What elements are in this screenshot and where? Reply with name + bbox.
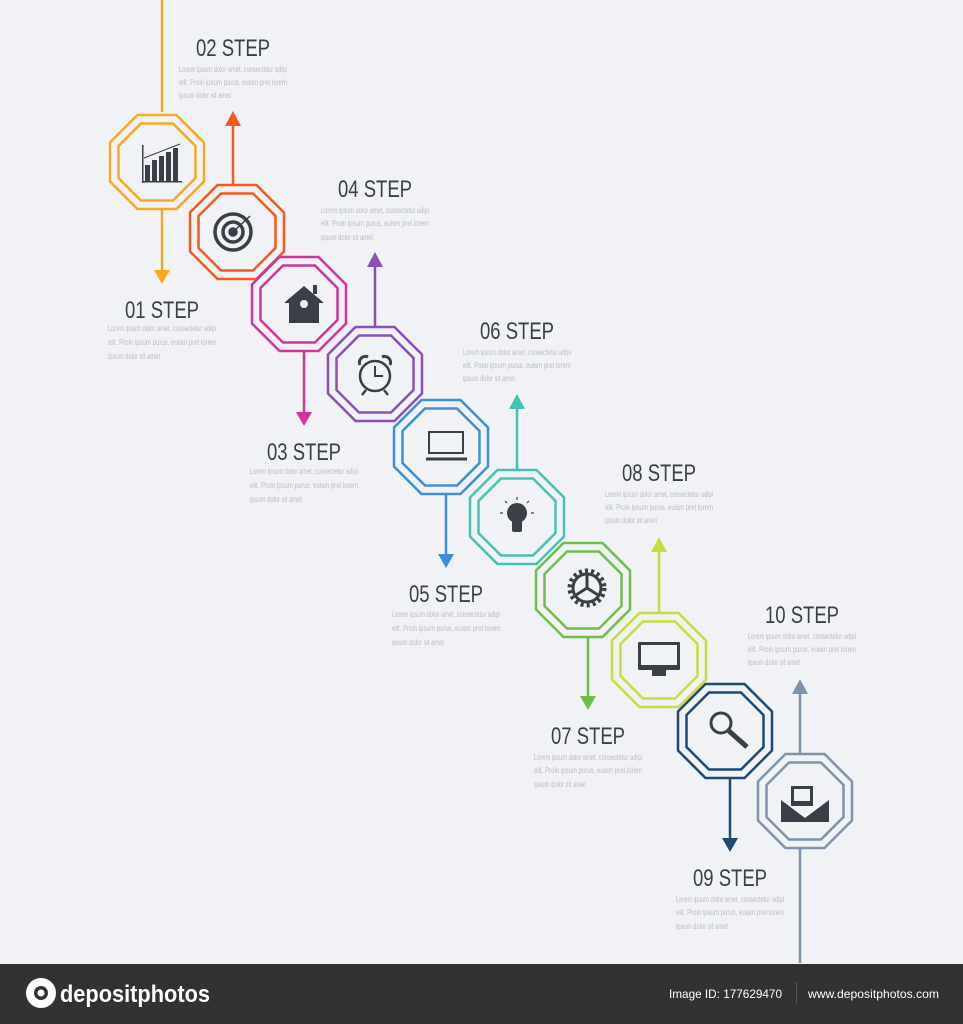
icon: lightbulb — [500, 497, 534, 532]
label 05: elit. Proin ipsum purus, euism pret lorem — [392, 623, 500, 633]
footer bar — [0, 964, 963, 1024]
footer logo — [26, 978, 210, 1008]
step 02 — [190, 111, 284, 279]
label 09: ipsum dolor sit amet — [676, 921, 728, 931]
connector line top — [161, 0, 163, 112]
step 03 — [252, 257, 346, 426]
icon: envelope — [781, 786, 829, 822]
icon: laptop — [426, 432, 467, 459]
label 05: 05 STEP — [409, 581, 483, 608]
label 04: 04 STEP — [338, 176, 412, 203]
icon: gear — [570, 571, 604, 605]
label 07: elit. Proin ipsum purus, euism pret lorem — [534, 765, 642, 775]
label 03: ipsum dolor sit amet — [250, 494, 302, 504]
label 10 — [748, 602, 856, 667]
label 01: ipsum dolor sit amet — [108, 351, 160, 361]
label 02: 02 STEP — [196, 35, 270, 62]
label 01: Lorem ipsum dolor amet, consectetur adipi — [108, 323, 216, 333]
label 02: elit. Proin ipsum purus, euism pret lorem — [179, 77, 287, 87]
label 04: Lorem ipsum dolor amet, consectetur adipi — [321, 205, 429, 215]
label 08: Lorem ipsum dolor amet, consectetur adipi — [605, 489, 713, 499]
footer logo: depositphotos — [60, 981, 210, 1008]
step 07 — [536, 543, 630, 710]
label 03 — [250, 439, 358, 504]
label 08: 08 STEP — [622, 460, 696, 487]
icon: monitor — [638, 642, 680, 676]
step 06 — [470, 394, 564, 564]
icon: bar chart — [142, 144, 182, 183]
label 08 — [605, 460, 713, 525]
label 07 — [534, 723, 642, 789]
label 06: elit. Proin ipsum purus, euism pret lorem — [463, 360, 571, 370]
label 01: 01 STEP — [125, 297, 199, 324]
label 10: ipsum dolor sit amet — [748, 657, 800, 667]
label 03: 03 STEP — [267, 439, 341, 466]
step 05 — [394, 400, 488, 568]
label 01: elit. Proin ipsum purus, euism pret lorem — [108, 337, 216, 347]
step 01 — [110, 115, 204, 284]
connector line bottom — [799, 848, 801, 963]
label 06: ipsum dolor sit amet — [463, 373, 515, 383]
label 06: 06 STEP — [480, 318, 554, 345]
label 08: elit. Proin ipsum purus, euism pret lorem — [605, 502, 713, 512]
label 06 — [463, 318, 571, 383]
step 08 — [612, 537, 706, 707]
label 10: 10 STEP — [765, 602, 839, 629]
label 09: 09 STEP — [693, 865, 767, 892]
label 10: elit. Proin ipsum purus, euism pret lorem — [748, 644, 856, 654]
label 09: Lorem ipsum dolor amet, consectetur adipi — [676, 894, 784, 904]
label 07: Lorem ipsum dolor amet, consectetur adipi — [534, 752, 642, 762]
label 08: ipsum dolor sit amet — [605, 515, 657, 525]
icon: target — [215, 214, 251, 250]
label 02 — [179, 35, 287, 100]
label 04: elit. Proin ipsum purus, euism pret lorem — [321, 218, 429, 228]
label 04 — [321, 176, 429, 242]
label 02: ipsum dolor sit amet — [179, 90, 231, 100]
step 10 — [758, 679, 852, 848]
step 04 — [328, 252, 422, 421]
label 05: Lorem ipsum dolor amet, consectetur adipi — [392, 609, 500, 619]
label 05: ipsum dolor sit amet — [392, 637, 444, 647]
label 03: elit. Proin ipsum purus, euism pret lorem — [250, 480, 358, 490]
step 09 — [678, 684, 772, 852]
footer bar: www.depositphotos.com — [807, 987, 939, 1001]
label 01 — [108, 297, 216, 361]
label 07: ipsum dolor sit amet — [534, 779, 586, 789]
label 10: Lorem ipsum dolor amet, consectetur adipi — [748, 631, 856, 641]
icon: magnifier — [711, 713, 747, 747]
icon: alarm clock — [359, 356, 391, 395]
label 07: 07 STEP — [551, 723, 625, 750]
label 05 — [392, 581, 500, 647]
label 02: Lorem ipsum dolor amet, consectetur adipi — [179, 64, 287, 74]
label 09 — [676, 865, 784, 931]
footer id: Image ID: 177629470 — [669, 987, 782, 1001]
label 06: Lorem ipsum dolor amet, consectetur adipi — [463, 347, 571, 357]
label 09: elit. Proin ipsum purus, euism pret lorem — [676, 907, 784, 917]
icon: house — [284, 285, 324, 323]
label 04: ipsum dolor sit amet — [321, 232, 373, 242]
label 03: Lorem ipsum dolor amet, consectetur adipi — [250, 466, 358, 476]
